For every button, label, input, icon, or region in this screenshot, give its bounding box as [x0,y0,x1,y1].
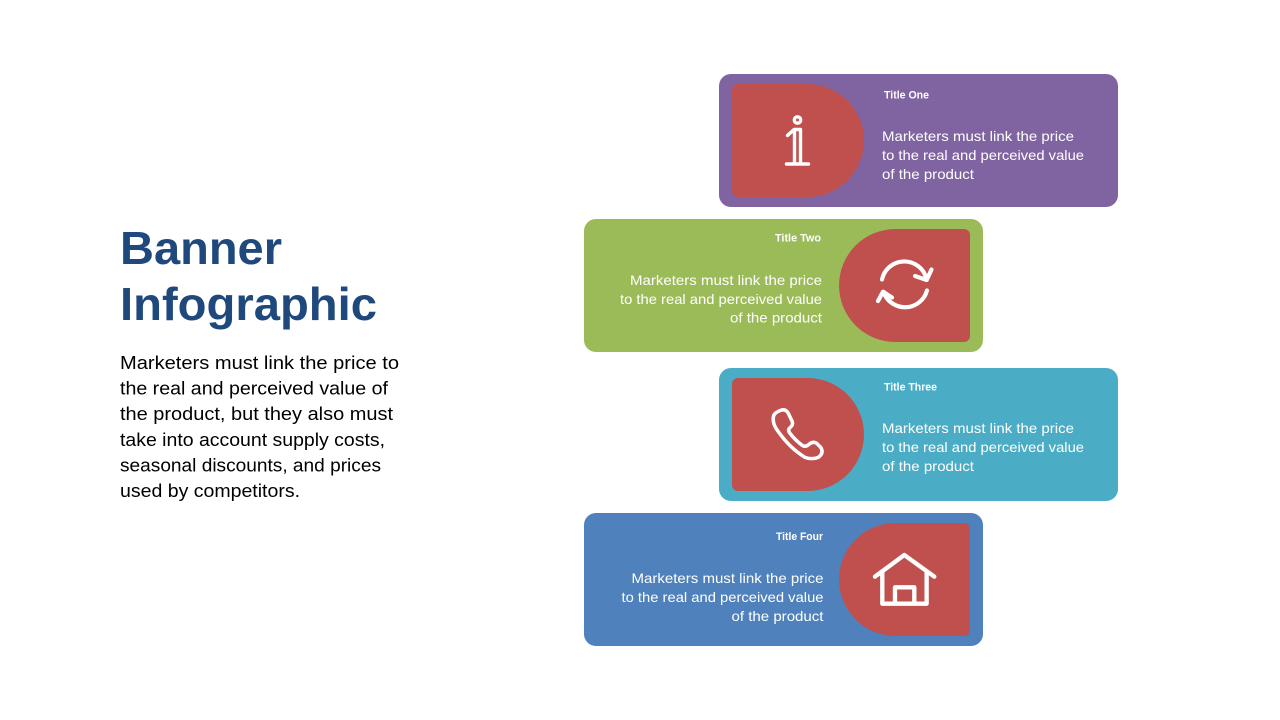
icon: refresh arrows [878,261,932,307]
red badge [839,523,970,636]
red badge [732,84,864,197]
intro text block: take into account supply costs, [120,430,385,450]
body text: to the real and perceived value [620,291,822,307]
title: Banner [120,222,282,274]
intro text block: used by competitors. [120,481,300,501]
body text: Marketers must link the price [632,570,824,586]
heading: title three: Title Three [884,382,937,394]
icon: phone [773,410,822,459]
panel background green [584,219,983,352]
red badge [732,378,864,491]
heading: title four: Title Four [776,531,823,543]
body text [882,128,1084,182]
icon: info [786,117,808,164]
title [120,222,377,330]
title: Infographic [120,278,377,330]
heading: title two: Title Two [775,233,822,245]
intro text block [120,353,399,501]
body text [622,570,824,624]
body text [882,420,1084,474]
body text: of the product [732,608,824,624]
red badge [839,229,970,342]
intro text block: the product, but they also must [120,404,393,424]
intro text block: seasonal discounts, and prices [120,456,381,476]
body text: Marketers must link the price [882,128,1074,144]
body text: to the real and perceived value [882,439,1084,455]
intro text block: Marketers must link the price to [120,353,399,373]
heading: title one: Title One [884,90,929,102]
body text: to the real and perceived value [882,147,1084,163]
body text: of the product [882,458,974,474]
panel: title four [584,513,983,646]
body text: Marketers must link the price [630,272,822,288]
body text: Marketers must link the price [882,420,1074,436]
body text [620,272,822,326]
panel background teal [719,368,1118,501]
panel: title one [719,74,1118,207]
panel background purple [719,74,1118,207]
panel: title three [719,368,1118,501]
body text: to the real and perceived value [622,589,824,605]
body text: of the product [882,166,974,182]
body text: of the product [730,310,822,326]
icon: house [875,555,934,604]
panel background blue [584,513,983,646]
intro text block: the real and perceived value of [120,379,389,399]
panel: title two [584,219,983,352]
